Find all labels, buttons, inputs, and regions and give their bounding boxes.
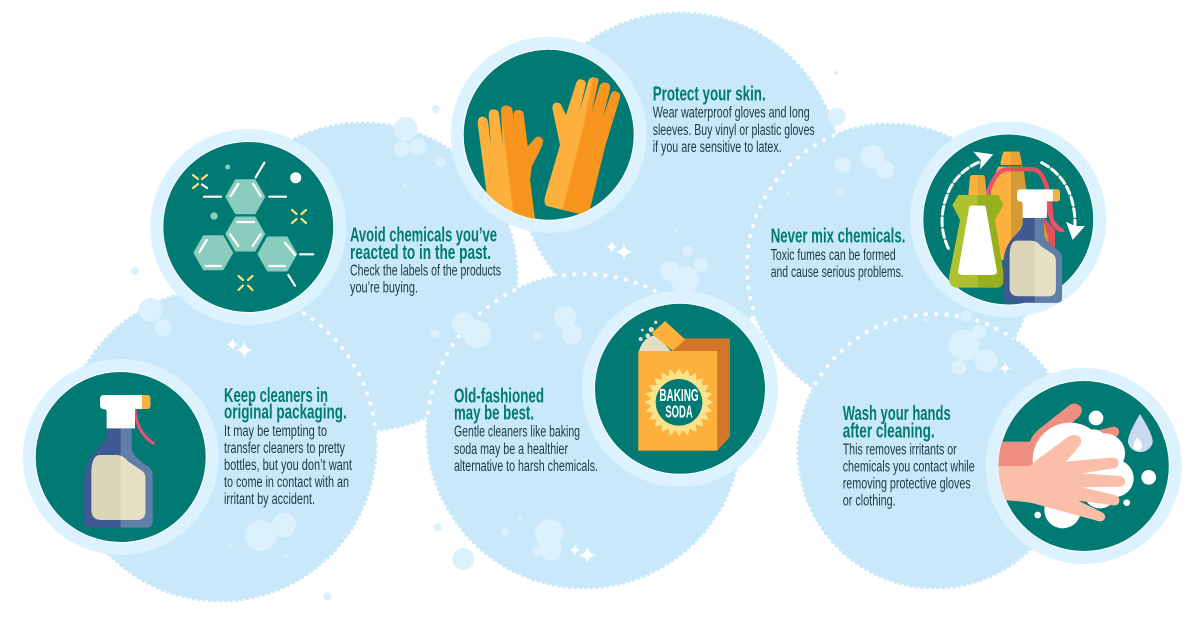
background: scalloped blue blobs — [64, 13, 1072, 601]
text: keep cleaners body: It may be tempting to — [224, 423, 327, 440]
heading: avoid chemicals — [350, 224, 497, 264]
icon: mixed bottles badge — [910, 122, 1106, 318]
icon: baking soda badge — [582, 291, 778, 487]
icon: chemical hexagons badge — [150, 129, 346, 325]
text: keep cleaners body: irritant by accident. — [224, 491, 315, 508]
heading: old-fashioned: may be best. — [454, 402, 534, 424]
icon: spray bottle badge — [23, 359, 219, 555]
text: avoid chemicals body: you’re buying. — [350, 280, 418, 297]
heading: old-fashioned: Old-fashioned — [454, 386, 544, 408]
text: wash your hands body — [843, 442, 975, 510]
background: soap bubbles — [131, 71, 998, 601]
text: wash your hands body: or clothing. — [843, 493, 896, 510]
panel: never mix chemicals — [771, 122, 1106, 318]
text: never mix chemicals body — [771, 247, 904, 281]
text: old-fashioned body — [454, 424, 598, 475]
heading: never mix chemicals: Never mix chemicals. — [771, 226, 905, 248]
icon: baking soda badge: BAKING — [659, 385, 699, 405]
text: wash your hands body: This removes irritants or — [843, 442, 957, 459]
background: sparkles — [226, 241, 1011, 564]
icon: gloves badge — [451, 37, 647, 233]
heading: keep cleaners: original packaging. — [224, 402, 347, 424]
text: protect your skin body: Wear waterproof gloves and long — [653, 105, 810, 122]
text: protect your skin body: sleeves. Buy vinyl or plastic gloves — [653, 122, 815, 139]
heading: avoid chemicals: reacted to in the past. — [350, 242, 491, 264]
text: never mix chemicals body: Toxic fumes can be formed — [771, 247, 896, 264]
text: keep cleaners body: to come in contact with an — [224, 474, 349, 491]
text: keep cleaners body: transfer cleaners to pretty — [224, 440, 345, 457]
icon: washing hands badge — [986, 368, 1182, 564]
text: old-fashioned body: alternative to harsh chemicals. — [454, 458, 598, 475]
text: protect your skin body — [653, 105, 815, 156]
text: avoid chemicals body: Check the labels of the products — [350, 263, 501, 280]
panel: protect your skin — [451, 37, 815, 233]
panel: wash your hands — [843, 368, 1182, 564]
text: old-fashioned body: Gentle cleaners like baking — [454, 424, 580, 441]
text: wash your hands body: chemicals you contact while — [843, 459, 975, 476]
heading: old-fashioned — [454, 386, 544, 424]
panel: keep cleaners in original packaging — [23, 359, 352, 555]
text: keep cleaners body — [224, 423, 352, 508]
text: protect your skin body: if you are sensitive to latex. — [653, 139, 782, 156]
heading: wash your hands: after cleaning. — [843, 420, 935, 442]
heading: keep cleaners — [224, 385, 347, 424]
heading: avoid chemicals: Avoid chemicals you’ve — [350, 224, 497, 246]
text: old-fashioned body: soda may be a healthier — [454, 441, 568, 458]
panel: old-fashioned may be best — [454, 291, 778, 487]
heading: keep cleaners: Keep cleaners in — [224, 385, 328, 407]
text: never mix chemicals body: and cause serious problems. — [771, 264, 904, 281]
text: avoid chemicals body — [350, 263, 501, 297]
heading: wash your hands — [843, 403, 951, 442]
text: wash your hands body: removing protective gloves — [843, 476, 971, 493]
text: keep cleaners body: bottles, but you don’t want — [224, 457, 352, 474]
heading: wash your hands: Wash your hands — [843, 403, 951, 425]
icon: baking soda badge: SODA — [665, 401, 693, 421]
panel: avoid chemicals — [150, 129, 501, 325]
heading: protect your skin: Protect your skin. — [653, 84, 766, 106]
